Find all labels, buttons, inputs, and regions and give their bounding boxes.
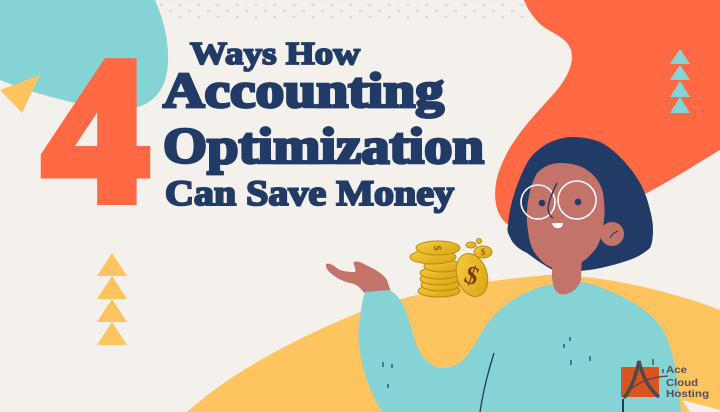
teal blob: top left — [0, 0, 168, 109]
mouth — [552, 223, 563, 228]
title: Optimization — [163, 119, 484, 175]
ear — [600, 222, 624, 246]
body and sleeve — [358, 282, 681, 412]
face — [527, 163, 604, 268]
hand — [326, 261, 391, 294]
dollar signs: $ — [431, 245, 443, 251]
eyes — [539, 200, 545, 206]
triangles: teal column — [670, 49, 690, 113]
title: Can Save Money — [165, 173, 454, 213]
shirt marks — [383, 337, 663, 388]
nose — [548, 183, 557, 218]
logo text: Ace — [666, 364, 687, 376]
neck — [552, 250, 582, 294]
numeral 4: 4 — [44, 17, 148, 244]
logo text: Hosting — [666, 388, 709, 400]
triangles: yellow column — [97, 253, 127, 345]
yellow hill — [187, 275, 720, 412]
logo text: Cloud — [666, 377, 698, 389]
title — [163, 35, 484, 213]
glasses — [521, 181, 596, 219]
logo mark — [621, 367, 659, 397]
logo text — [666, 364, 709, 400]
title: Accounting — [163, 62, 444, 118]
title: Ways How — [190, 35, 360, 71]
logo — [621, 361, 709, 412]
coins: $ — [461, 260, 483, 291]
coins: $ — [481, 247, 486, 257]
hair — [507, 137, 653, 272]
triangle: yellow top left — [0, 75, 40, 113]
orange blob: top right — [495, 0, 720, 240]
sleeve fold — [480, 353, 494, 412]
coins — [410, 238, 493, 301]
person — [326, 137, 681, 412]
